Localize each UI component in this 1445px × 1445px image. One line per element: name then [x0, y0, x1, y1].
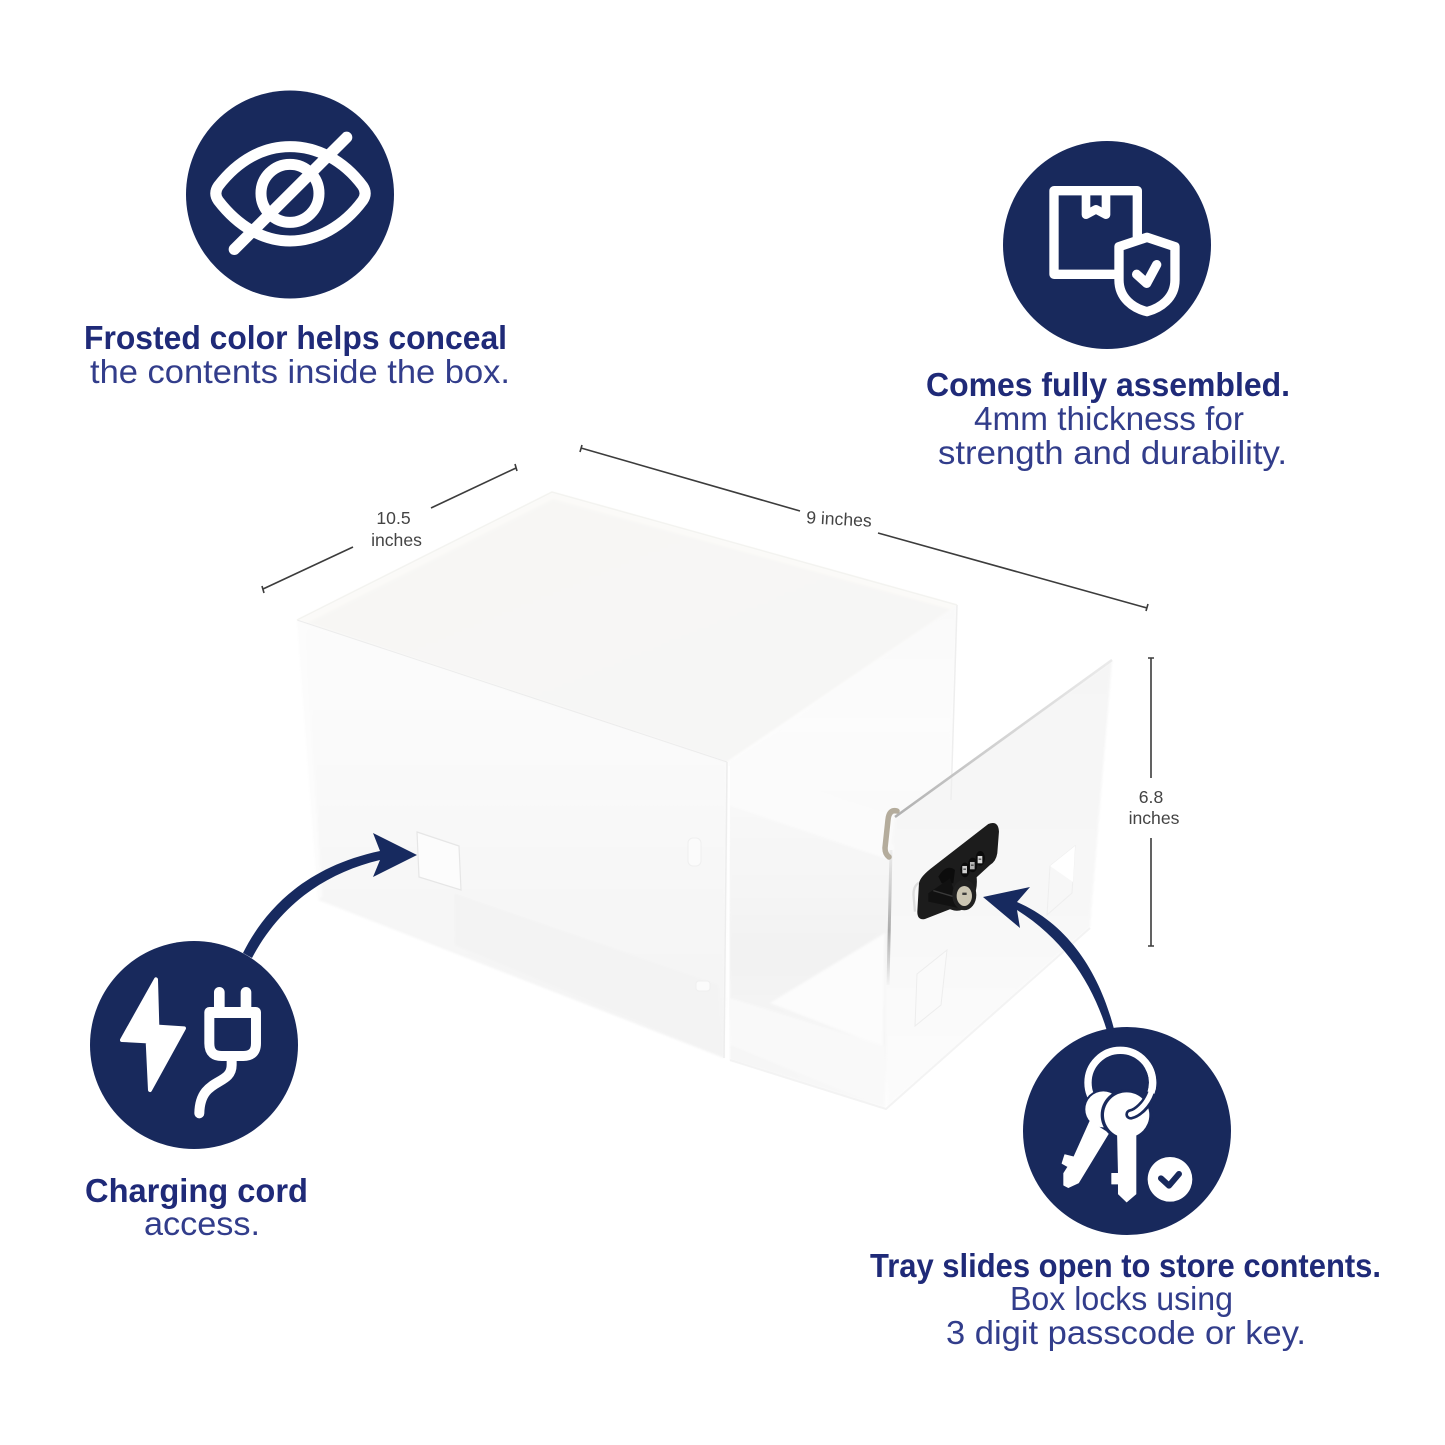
dimension: 6.8 inches: inches — [1129, 808, 1180, 828]
side notches — [688, 838, 701, 866]
text: charging cord: Charging cord — [85, 1172, 308, 1209]
dimension: 9 inches — [580, 445, 1148, 611]
text: charging cord — [85, 1172, 308, 1242]
dimension: 6.8 inches — [1129, 658, 1180, 946]
text: charging cord: access. — [144, 1205, 260, 1242]
text: fully assembled: Comes fully assembled. — [926, 366, 1290, 403]
dimension: 10.5 inches — [262, 464, 517, 593]
text: frosted color: Frosted color helps conceal — [84, 319, 507, 356]
text: frosted color: the contents inside the box. — [90, 353, 510, 390]
icon: package with shield — [1003, 141, 1211, 349]
dimension: 9 inches: 9 inches — [806, 507, 872, 531]
dimension: 10.5 inches: inches — [371, 530, 422, 550]
text: fully assembled: 4mm thickness for — [974, 400, 1244, 437]
arrow: to charging cord cutout — [243, 833, 417, 958]
icon: crossed-out eye — [186, 90, 394, 298]
icon: bolt and plug — [90, 941, 298, 1149]
text: tray slides: Tray slides open to store contents. — [870, 1247, 1381, 1284]
dimension: 6.8 inches: 6.8 — [1139, 787, 1163, 807]
text: tray slides: 3 digit passcode or key. — [946, 1314, 1306, 1351]
edge highlights — [297, 620, 727, 762]
text: fully assembled — [926, 366, 1290, 471]
arrow: to lock — [983, 887, 1114, 1031]
text: tray slides: Box locks using — [1010, 1280, 1233, 1317]
text: tray slides — [870, 1247, 1381, 1351]
icon: keys with check — [1023, 1027, 1231, 1235]
sliding door edges — [895, 660, 1112, 817]
text: frosted color — [84, 319, 510, 390]
latch — [885, 811, 897, 857]
combination lock — [914, 823, 999, 919]
text: fully assembled: strength and durability. — [938, 434, 1287, 471]
product: frosted acrylic box with open tray — [297, 492, 1112, 1109]
charging cord cutout — [417, 832, 461, 890]
door cutouts — [1047, 846, 1075, 915]
dimension: 10.5 inches: 10.5 — [376, 508, 411, 528]
box shell faces — [297, 492, 1112, 1108]
